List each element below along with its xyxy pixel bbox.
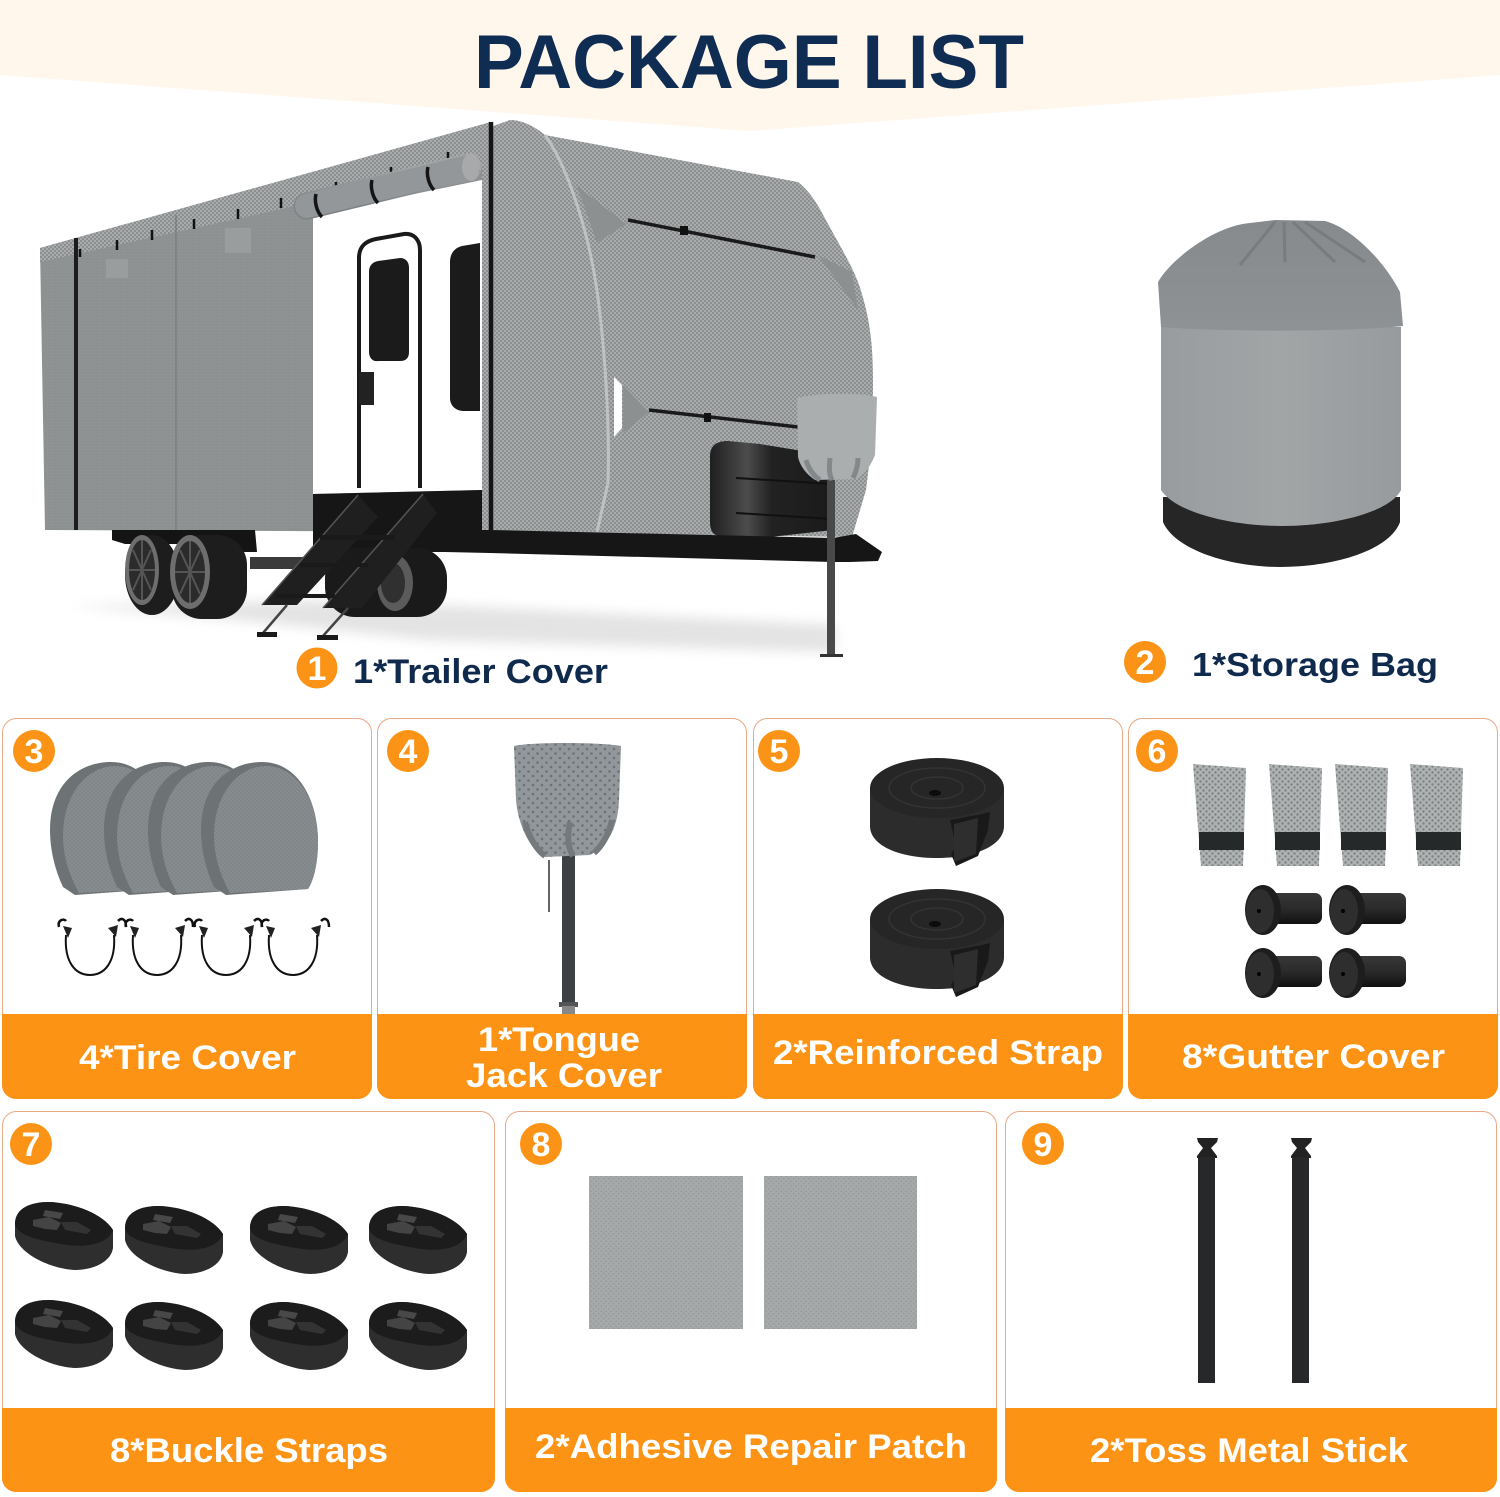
axle [250, 557, 310, 569]
badge 5 [758, 730, 800, 772]
strap coils [15, 1202, 467, 1370]
label: storage bag: 1*Storage Bag [1192, 646, 1438, 683]
rear tyres [325, 548, 447, 617]
caption: 2*Adhesive Repair Patch [535, 1428, 967, 1466]
caption band [505, 1408, 997, 1492]
panel: tongue jack cover: Jack Cover [466, 1057, 662, 1095]
ground shadow [70, 600, 835, 652]
caption: 8*Buckle Straps [110, 1432, 388, 1470]
propane tank [710, 441, 833, 537]
badge 4: 4 [399, 733, 418, 771]
awning roller [294, 153, 480, 218]
panel: reinforced strap [753, 718, 1123, 1099]
front panel seam [545, 135, 608, 532]
panel: gutter cover [1128, 718, 1498, 1099]
panel: toss metal stick [1005, 1112, 1497, 1492]
title: PACKAGE LIST [474, 20, 1024, 105]
repair patches [589, 1176, 917, 1329]
door handle [359, 372, 374, 405]
trailer illustration [40, 120, 882, 657]
bag gathers [1240, 222, 1365, 265]
header band [0, 0, 1500, 131]
badge 6 [1136, 730, 1178, 772]
badge 5: 5 [770, 733, 788, 771]
front tyres [125, 535, 247, 619]
badge 9: 9 [1034, 1126, 1052, 1164]
badge 6: 6 [1148, 733, 1166, 771]
badge 4 [387, 730, 429, 772]
caption band [2, 1014, 372, 1099]
panel: tire cover [2, 718, 372, 1099]
front shell [482, 120, 873, 537]
tire covers [50, 762, 318, 895]
gutter sleeves [1193, 764, 1463, 866]
fenders [112, 530, 257, 552]
caption: 8*Gutter Cover [1182, 1038, 1445, 1076]
jack cover [514, 743, 621, 857]
panel: adhesive repair patch [505, 1112, 997, 1492]
tongue jack cover [797, 394, 877, 480]
caption: 2*Toss Metal Stick [1090, 1432, 1408, 1470]
caption band [753, 1014, 1123, 1099]
chassis [313, 530, 882, 562]
badge 8 [520, 1123, 562, 1165]
door panel [313, 180, 482, 494]
side seams and flaps [74, 152, 448, 530]
door [359, 234, 420, 488]
zipper [489, 122, 493, 530]
badge 7: 7 [22, 1126, 40, 1164]
panel: buckle straps [2, 1112, 495, 1492]
upper strap [577, 186, 858, 310]
badge 8: 8 [532, 1126, 550, 1164]
caption band [377, 1014, 747, 1099]
storage bag [1158, 220, 1403, 567]
badge 9 [1022, 1123, 1064, 1165]
black skirt [313, 490, 482, 532]
bungee cords [59, 919, 329, 975]
caption band [1005, 1408, 1497, 1492]
roof edge texture [40, 122, 491, 262]
lower strap [614, 377, 798, 437]
jack pole [549, 855, 578, 1014]
steps [257, 494, 437, 640]
caption: 4*Tire Cover [79, 1039, 296, 1077]
caption: 2*Reinforced Strap [773, 1034, 1103, 1072]
panel: tongue jack cover [377, 718, 747, 1099]
door window [369, 258, 409, 361]
side wall [40, 122, 491, 532]
label: storage bag [1124, 641, 1438, 683]
label: storage bag: 2 [1136, 644, 1154, 682]
gutter plugs [1245, 885, 1406, 998]
label: trailer cover: 1 [308, 650, 326, 688]
caption band [1128, 1014, 1498, 1099]
label: trailer cover [296, 648, 608, 691]
side window [450, 243, 480, 411]
caption: 1*Tongue [478, 1021, 640, 1059]
badge 7 [10, 1123, 52, 1165]
badge 3: 3 [25, 733, 43, 771]
bag top [1158, 220, 1403, 331]
bag base [1163, 497, 1400, 567]
toss sticks [1197, 1138, 1312, 1383]
caption band [2, 1408, 495, 1492]
label: trailer cover: 1*Trailer Cover [353, 653, 608, 691]
tongue jack [820, 480, 843, 657]
bag body [1161, 327, 1401, 526]
badge 3 [13, 730, 55, 772]
strap rolls [870, 758, 1004, 997]
